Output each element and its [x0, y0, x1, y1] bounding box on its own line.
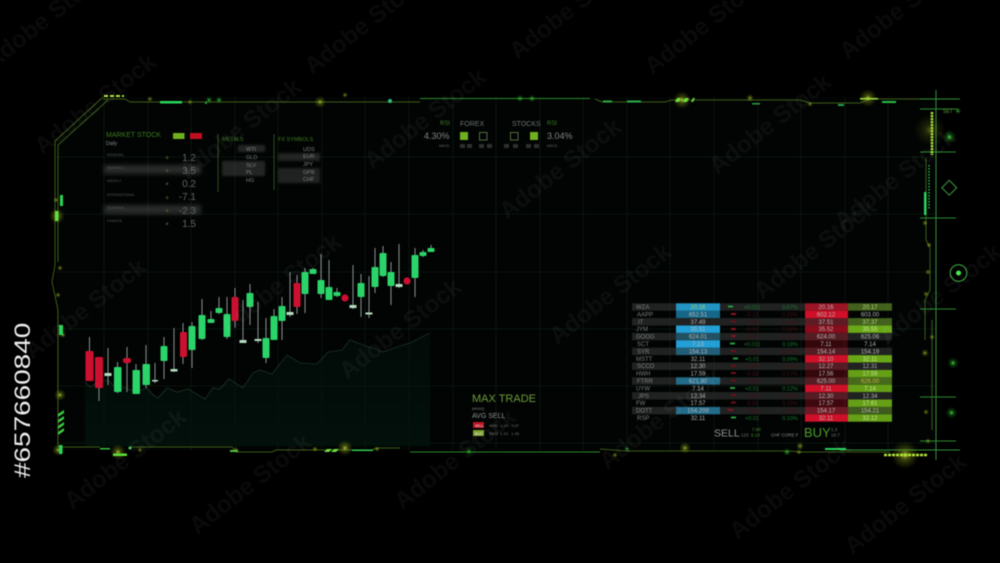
change values: -0.05: [746, 379, 758, 385]
sell label: SELL: [714, 428, 740, 440]
table: quotes: [632, 303, 892, 422]
glow dot: [942, 130, 956, 144]
ticker label: BRWQ: [472, 406, 484, 411]
sell figures: 123: [741, 432, 749, 438]
symbols: SCT: [637, 342, 649, 348]
change percents: 0.11%: [782, 320, 798, 326]
row labels: QUARTER: [107, 206, 125, 210]
last prices: 154.13: [689, 349, 708, 355]
row plus signs: +: [165, 208, 169, 215]
change percents: 0.17%: [782, 372, 798, 378]
change percents: 0.57%: [782, 305, 798, 311]
ask prices: 35.55: [862, 327, 878, 333]
fx heading: FX SYMBOLS: [278, 137, 313, 143]
sell buy summary: [714, 425, 840, 440]
right rail indicators: [924, 108, 967, 419]
fx symbols list: GPB: [303, 170, 315, 176]
sell row: [473, 422, 520, 428]
watermarks: Adobe Stock: [214, 228, 347, 340]
glow dot: [947, 357, 959, 369]
symbols: FTRR: [637, 379, 654, 385]
left macd: MACD: [439, 144, 450, 148]
stock id: #657660840: [11, 323, 35, 478]
symbols: [636, 305, 655, 422]
last prices: [687, 305, 710, 422]
metals symbols: SLV: [246, 163, 256, 169]
last prices: 17.57: [690, 401, 706, 407]
last prices: 12.34: [690, 394, 706, 400]
symbols: RSP: [637, 416, 649, 422]
top dotted bar: [931, 112, 933, 155]
panel: max trade: [472, 393, 536, 436]
row plus signs: +: [165, 168, 169, 175]
symbols: MSTT: [636, 357, 653, 363]
green bar: [924, 192, 926, 215]
lower dotted bar: [928, 165, 930, 210]
change values: -0.06: [746, 409, 758, 415]
bid prices: 12.30: [818, 394, 834, 400]
symbols: JPS: [638, 394, 649, 400]
change percents: 0.12%: [782, 386, 798, 392]
forex heading: FOREX: [460, 121, 484, 128]
ask prices: 7.14: [864, 342, 876, 348]
last prices: 37.49: [690, 320, 706, 326]
bid prices: [817, 305, 836, 422]
row values: 3.5: [182, 166, 196, 177]
left rsi value: 4.30%: [424, 131, 450, 141]
bid prices: 32.11: [819, 416, 834, 422]
sell figures: 5.13: [751, 432, 760, 438]
sell row: 4090 1.24 3.97: [489, 423, 520, 428]
ask prices: 32.11: [863, 357, 878, 363]
bid prices: 32.10: [818, 357, 834, 363]
daily label: Daily: [106, 141, 118, 147]
symbols: DOTT: [636, 409, 653, 415]
watermarks: Adobe Stock: [19, 253, 152, 365]
bid prices: 154.14: [817, 349, 836, 355]
change values: -0.01: [746, 364, 758, 370]
left rail bars: [55, 195, 64, 454]
bid prices: 20.16: [818, 305, 834, 311]
change percents: 0.10%: [782, 416, 798, 422]
change percents: 0.09%: [782, 357, 798, 363]
right rsi value: 3.04%: [547, 131, 573, 141]
left rsi: RSI: [440, 121, 450, 127]
row labels: FINANCE: [107, 219, 123, 223]
target icon: [950, 265, 967, 281]
right macd: MACD: [547, 144, 558, 148]
change percents: 0.18%: [782, 342, 798, 348]
buy figures: 18.7: [831, 432, 840, 438]
buy figures: 1.3: [831, 427, 838, 432]
change values: -0.03: [746, 335, 758, 341]
watermarks: Adobe Stock: [334, 273, 467, 385]
metals symbols: HG: [246, 178, 254, 184]
frame: [52, 90, 960, 460]
change values: -0.01: [746, 320, 758, 326]
bid prices: 154.17: [817, 409, 836, 415]
bottom bars and lights: [100, 446, 927, 456]
symbols: AAPP: [637, 312, 653, 318]
symbols: FW: [636, 401, 646, 407]
symbols: SYR: [637, 349, 650, 355]
watermarks: Adobe Stock: [724, 433, 857, 545]
right rail ticks: [920, 109, 958, 441]
ask prices: 154.21: [861, 409, 880, 415]
watermarks: Adobe Stock: [389, 403, 522, 515]
last prices: 652.51: [689, 312, 708, 318]
change percents: 0.13%: [782, 364, 798, 370]
change values: -0.12: [746, 312, 758, 318]
buy row: [473, 430, 520, 436]
bid prices: 625.00: [817, 379, 836, 385]
bid prices: 17.56: [818, 372, 834, 378]
change values: -0.03: [746, 394, 758, 400]
change values: -0.02: [746, 327, 758, 333]
ask prices: 20.17: [862, 305, 878, 311]
ask prices: 12.31: [862, 364, 878, 370]
metals symbols: PL: [246, 170, 253, 176]
sell figures: [741, 427, 761, 438]
fx symbols list: CHF: [303, 177, 315, 183]
change percents: 0.09%: [782, 349, 798, 355]
watermarks: Adobe Stock: [544, 238, 677, 350]
bands: [278, 153, 320, 183]
change values: -0.02: [746, 372, 758, 378]
candlestick chart: [86, 244, 434, 401]
symbols: IT: [638, 320, 644, 326]
buy label: BUY: [804, 425, 831, 440]
bid prices: 37.51: [818, 320, 834, 326]
last prices: 17.59: [690, 372, 706, 378]
change values: +0.011: [744, 342, 760, 348]
red button: [190, 133, 202, 139]
ask prices: 154.19: [861, 349, 880, 355]
ask prices: 32.12: [862, 416, 878, 422]
symbols: HWH: [636, 372, 650, 378]
last prices: 32.11: [691, 416, 706, 422]
row values: [179, 153, 196, 230]
change values: +0.01: [745, 416, 759, 422]
bid prices: 17.57: [818, 401, 834, 407]
ask prices: 37.37: [862, 320, 878, 326]
change values: -0.04: [746, 349, 758, 355]
change percents: 0.19%: [782, 394, 798, 400]
metals symbols: GLD: [246, 155, 257, 161]
small cells: [460, 144, 539, 148]
watermarks: Adobe Stock: [704, 68, 837, 180]
buy row: 9503 1.23 1.43: [489, 431, 520, 436]
change percents: 0.25%: [782, 312, 798, 318]
last prices: 624.01: [689, 335, 708, 341]
glow lights: yellow: [49, 89, 946, 469]
last prices: 621.90: [689, 379, 708, 385]
symbols: SCCO: [637, 364, 655, 370]
bid prices: 7.11: [820, 386, 832, 392]
max trade heading: MAX TRADE: [472, 393, 536, 405]
bid prices: 12.27: [818, 364, 834, 370]
row plus signs: +: [165, 195, 169, 202]
row plus signs: +: [165, 155, 169, 162]
panel: metals: [218, 134, 265, 192]
highlight bands: [104, 165, 201, 214]
set dot: [954, 108, 962, 114]
symbols: JYM: [636, 327, 648, 333]
change percents: [782, 305, 798, 422]
last prices: 32.11: [691, 357, 706, 363]
metals heading: METALS: [222, 137, 244, 143]
bid prices: 602.12: [817, 312, 836, 318]
watermarks: Adobe Stock: [29, 48, 162, 160]
symbols: GOOG: [636, 335, 655, 341]
ask prices: 12.34: [862, 394, 878, 400]
stocks heading: STOCKS: [512, 121, 541, 128]
bid prices: 35.52: [818, 327, 834, 333]
watermarks: Adobe Stock: [594, 363, 727, 475]
sell figures: 7.90: [752, 427, 761, 432]
row values: 1.5: [182, 219, 196, 230]
blue column: [676, 303, 720, 414]
area chart: [85, 333, 430, 446]
bands: [222, 145, 265, 176]
row values: -2.3: [179, 206, 196, 217]
watermarks: Adobe Stock: [59, 403, 192, 515]
grid: [56, 97, 936, 450]
change percents: 0.18%: [782, 327, 798, 333]
avg sell: AVG SELL: [472, 413, 505, 420]
ask prices: 17.59: [862, 372, 878, 378]
row labels: MONTHLY: [107, 166, 125, 170]
glow dot: [946, 407, 958, 419]
change values: +0.01: [745, 357, 759, 363]
change percents: 0.15%: [782, 401, 798, 407]
last prices: 12.30: [690, 364, 706, 370]
last prices: 7.13: [692, 342, 704, 348]
watermarks: Adobe Stock: [359, 63, 492, 175]
sell row: SELL: [475, 424, 484, 428]
ask prices: 603.00: [861, 312, 880, 318]
buy row: BUY: [475, 432, 483, 436]
green column: [848, 303, 892, 422]
panel: forex and stocks: [424, 121, 573, 148]
ask prices: 17.61: [862, 401, 878, 407]
fx symbols list: JPY: [303, 162, 313, 168]
ask prices: [861, 305, 880, 422]
panel background: [56, 97, 936, 450]
fx symbols list: UDS: [303, 147, 315, 153]
buy figures: [831, 427, 840, 438]
change percents: 0.21%: [782, 379, 798, 385]
ask prices: 626.00: [861, 379, 880, 385]
ask prices: 7.14: [864, 386, 876, 392]
watermarks: Adobe Stock: [829, 123, 962, 235]
change values: +0.01: [745, 386, 759, 392]
change percents: 0.22%: [782, 335, 798, 341]
change values: -0.01: [746, 401, 758, 407]
symbols: UYW: [636, 386, 650, 392]
last prices: 154.209: [687, 409, 710, 415]
row labels: [107, 153, 135, 223]
row labels: RENEWAL: [107, 153, 124, 157]
row labels: WEEKLY: [107, 179, 122, 183]
green button: [173, 133, 184, 139]
market stock heading: MARKET STOCK: [106, 132, 161, 139]
diamond icon: [942, 180, 957, 195]
change arrows: [728, 306, 738, 418]
fx symbols list: EUR: [303, 154, 315, 160]
selector boxes: [460, 132, 538, 140]
last prices: 7.14: [692, 386, 704, 392]
top bars and lights: [104, 94, 896, 106]
row labels: INTERNATIONAL: [107, 193, 135, 197]
row values: 1.2: [182, 153, 196, 164]
metals symbols: [246, 147, 257, 184]
bid prices: 624.00: [817, 335, 836, 341]
red column: [805, 303, 848, 422]
row values: -7.1: [179, 192, 196, 203]
row plus signs: +: [165, 221, 169, 228]
row stripes: [632, 303, 892, 414]
watermarks: Adobe Stock: [174, 73, 307, 185]
last prices: 35.51: [690, 327, 706, 333]
ask prices: 625.06: [861, 335, 880, 341]
change values: +0.011: [744, 305, 760, 311]
change percents: 0.24%: [782, 409, 798, 415]
watermarks: Adobe Stock: [749, 193, 882, 305]
bid prices: 7.11: [820, 342, 832, 348]
chip core label: CHF CORE F: [771, 432, 799, 438]
panel: fx symbols: [274, 134, 320, 190]
row plus signs: +: [165, 181, 169, 188]
change values: [744, 305, 760, 422]
panel: market stock: [104, 132, 202, 230]
last prices: 20.16: [690, 305, 706, 311]
watermarks: Adobe Stock: [494, 113, 627, 225]
row plus signs: [165, 155, 169, 228]
fx symbols list: [303, 147, 315, 183]
set label: SET: [943, 109, 953, 115]
right rsi: RSI: [547, 121, 557, 127]
metals symbols: WTI: [246, 147, 257, 153]
row values: 0.2: [182, 179, 196, 190]
symbols: WZA: [636, 305, 649, 311]
watermarks: Adobe Stock: [184, 428, 317, 540]
watermarks: Adobe Stock: [839, 448, 972, 560]
